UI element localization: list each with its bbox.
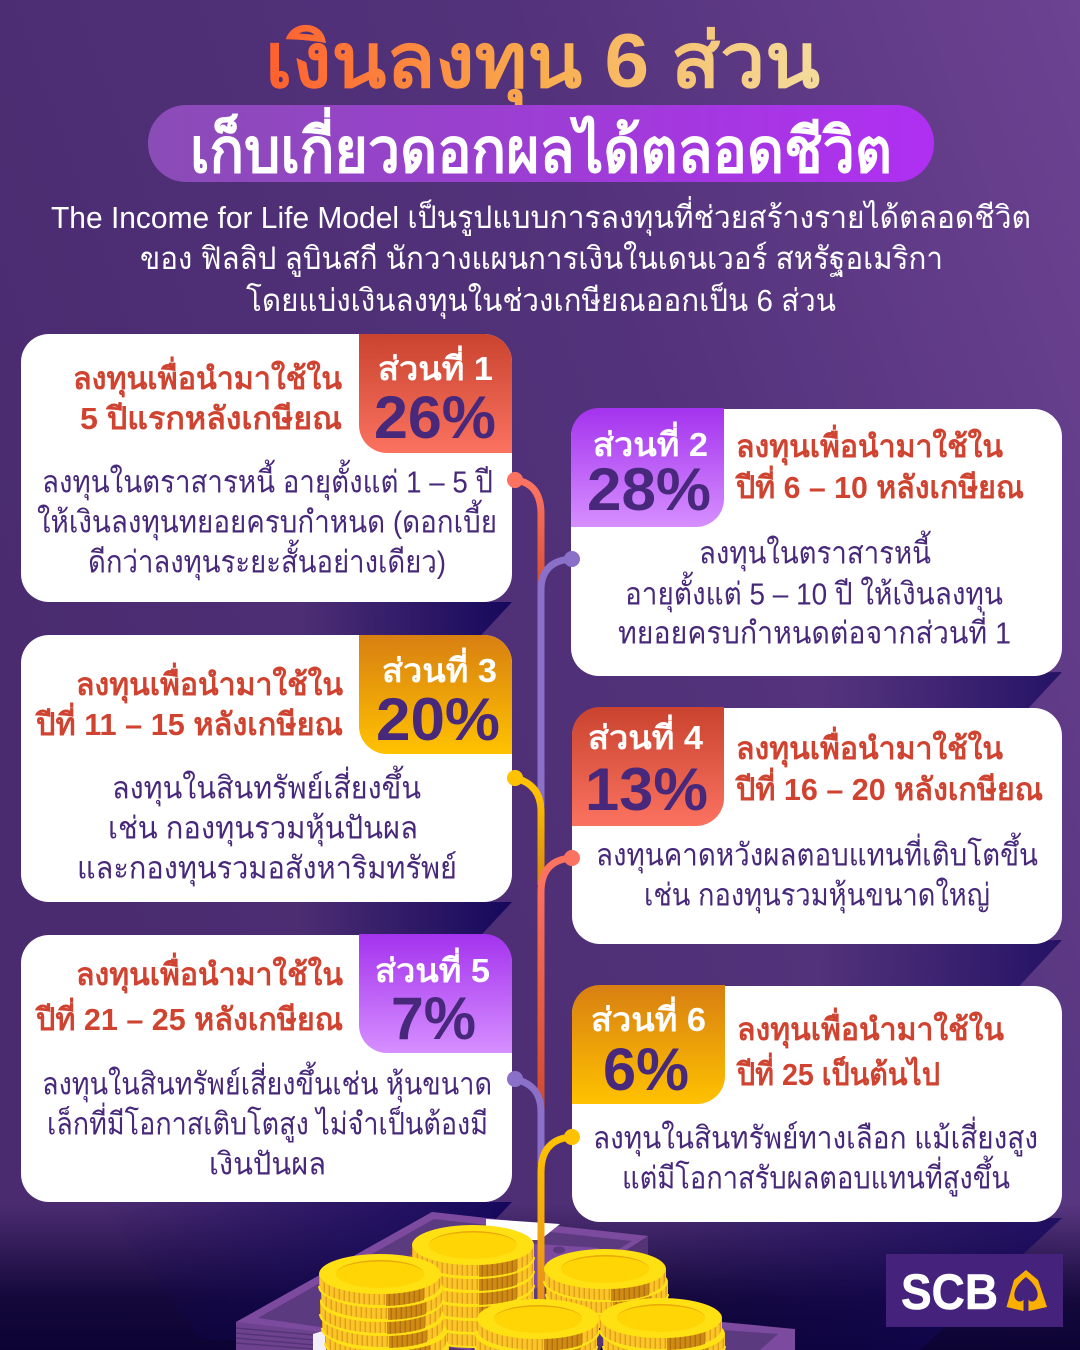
intro text — [51, 196, 1031, 320]
card 2: ทยอยครบกำหนดต่อจากส่วนที่ 1 — [618, 612, 1011, 650]
SCB logo: SCB — [901, 1264, 998, 1320]
card 5: ลงทุนในสินทรัพย์เสี่ยงขึ้นเช่น หุ้นขนาด — [42, 1062, 492, 1104]
card 3: เช่น กองทุนรวมหุ้นปันผล — [108, 810, 418, 848]
card 5: เงินปันผล — [209, 1146, 326, 1182]
connector: part 2 — [541, 551, 580, 806]
card 3: ปีที่ 11 – 15 หลังเกษียณ — [35, 702, 343, 742]
card 3: ส่วนที่ 3 — [382, 647, 497, 689]
connector: part 6 — [541, 1129, 580, 1310]
card 5: ลงทุนเพื่อนำมาใช้ใน — [76, 952, 343, 994]
card 3 — [21, 635, 523, 902]
card 2: ลงทุนในตราสารหนี้ — [699, 530, 931, 572]
title: เงินลงทุน 6 ส่วน — [265, 19, 820, 109]
intro text: The Income for Life Model เป็นรูปแบบการลงทุนที่ช่วยสร้างรายได้ตลอดชีวิต — [51, 196, 1031, 237]
card 4: 13% — [585, 756, 708, 823]
card 1 — [21, 334, 523, 602]
card 6: 6% — [603, 1036, 689, 1103]
card 6 — [564, 985, 1062, 1222]
card 5: ส่วนที่ 5 — [375, 947, 490, 989]
card 4: ลงทุนเพื่อนำมาใช้ใน — [736, 726, 1003, 768]
card 5 — [21, 934, 523, 1202]
card 2 — [564, 408, 1062, 676]
card 2: ปีที่ 6 – 10 หลังเกษียณ — [735, 465, 1024, 505]
card 6: ส่วนที่ 6 — [591, 996, 706, 1038]
connector: part 4 — [541, 850, 580, 1115]
card 1: ให้เงินลงทุนทยอยครบกำหนด (ดอกเบี้ย — [37, 500, 497, 542]
card 4: ปีที่ 16 – 20 หลังเกษียณ — [735, 767, 1043, 807]
intro text: โดยแบ่งเงินลงทุนในช่วงเกษียณออกเป็น 6 ส่วน — [246, 282, 836, 320]
subtitle pill: เก็บเกี่ยวดอกผลได้ตลอดชีวิต — [190, 107, 892, 186]
card 6: แต่มีโอกาสรับผลตอบแทนที่สูงขึ้น — [622, 1156, 1010, 1196]
card 2: ส่วนที่ 2 — [593, 421, 708, 463]
card 4: ส่วนที่ 4 — [588, 714, 704, 756]
bill stacks — [236, 1212, 795, 1350]
card 2: ลงทุนเพื่อนำมาใช้ใน — [736, 424, 1003, 466]
connector: part 5 — [507, 1071, 541, 1165]
connector: part 1 — [507, 472, 541, 590]
card 3: 20% — [376, 686, 500, 753]
card 3: และกองทุนรวมอสังหาริมทรัพย์ — [77, 850, 457, 888]
card 1: ลงทุนเพื่อนำมาใช้ใน — [73, 356, 342, 398]
intro text: ของ ฟิลลิป ลูบินสกี นักวางแผนการเงินในเดนเวอร์ สหรัฐอเมริกา — [140, 241, 943, 277]
card 5: ปีที่ 21 – 25 หลังเกษียณ — [35, 997, 343, 1037]
card 4: ลงทุนคาดหวังผลตอบแทนที่เติบโตขึ้น — [596, 832, 1038, 874]
card 1: 26% — [374, 384, 496, 451]
card 1: ส่วนที่ 1 — [378, 345, 493, 387]
card 4 — [564, 707, 1062, 944]
connector lines — [507, 472, 580, 1310]
SCB logo — [886, 1254, 1063, 1327]
card 5: 7% — [391, 985, 476, 1052]
card 3: ลงทุนเพื่อนำมาใช้ใน — [76, 662, 343, 704]
card 6: ลงทุนในสินทรัพย์ทางเลือก แม้เสี่ยงสูง — [593, 1116, 1038, 1158]
card 6: ลงทุนเพื่อนำมาใช้ใน — [737, 1007, 1004, 1049]
card 6: ปีที่ 25 เป็นต้นไป — [736, 1052, 940, 1092]
card 1: ลงทุนในตราสารหนี้ อายุตั้งแต่ 1 – 5 ปี — [42, 460, 493, 502]
connector: part 3 — [507, 770, 541, 885]
card 2: 28% — [587, 456, 711, 523]
card 4: เช่น กองทุนรวมหุ้นขนาดใหญ่ — [644, 878, 990, 914]
card 1: 5 ปีแรกหลังเกษียณ — [80, 401, 342, 436]
card 2: อายุตั้งแต่ 5 – 10 ปี ให้เงินลงทุน — [625, 572, 1003, 614]
gold coins — [319, 1225, 725, 1350]
card 3: ลงทุนในสินทรัพย์เสี่ยงขึ้น — [112, 766, 421, 808]
card 5: เล็กที่มีโอกาสเติบโตสูง ไม่จำเป็นต้องมี — [47, 1102, 488, 1142]
card 1: ดีกว่าลงทุนระยะสั้นอย่างเดียว) — [88, 540, 446, 582]
